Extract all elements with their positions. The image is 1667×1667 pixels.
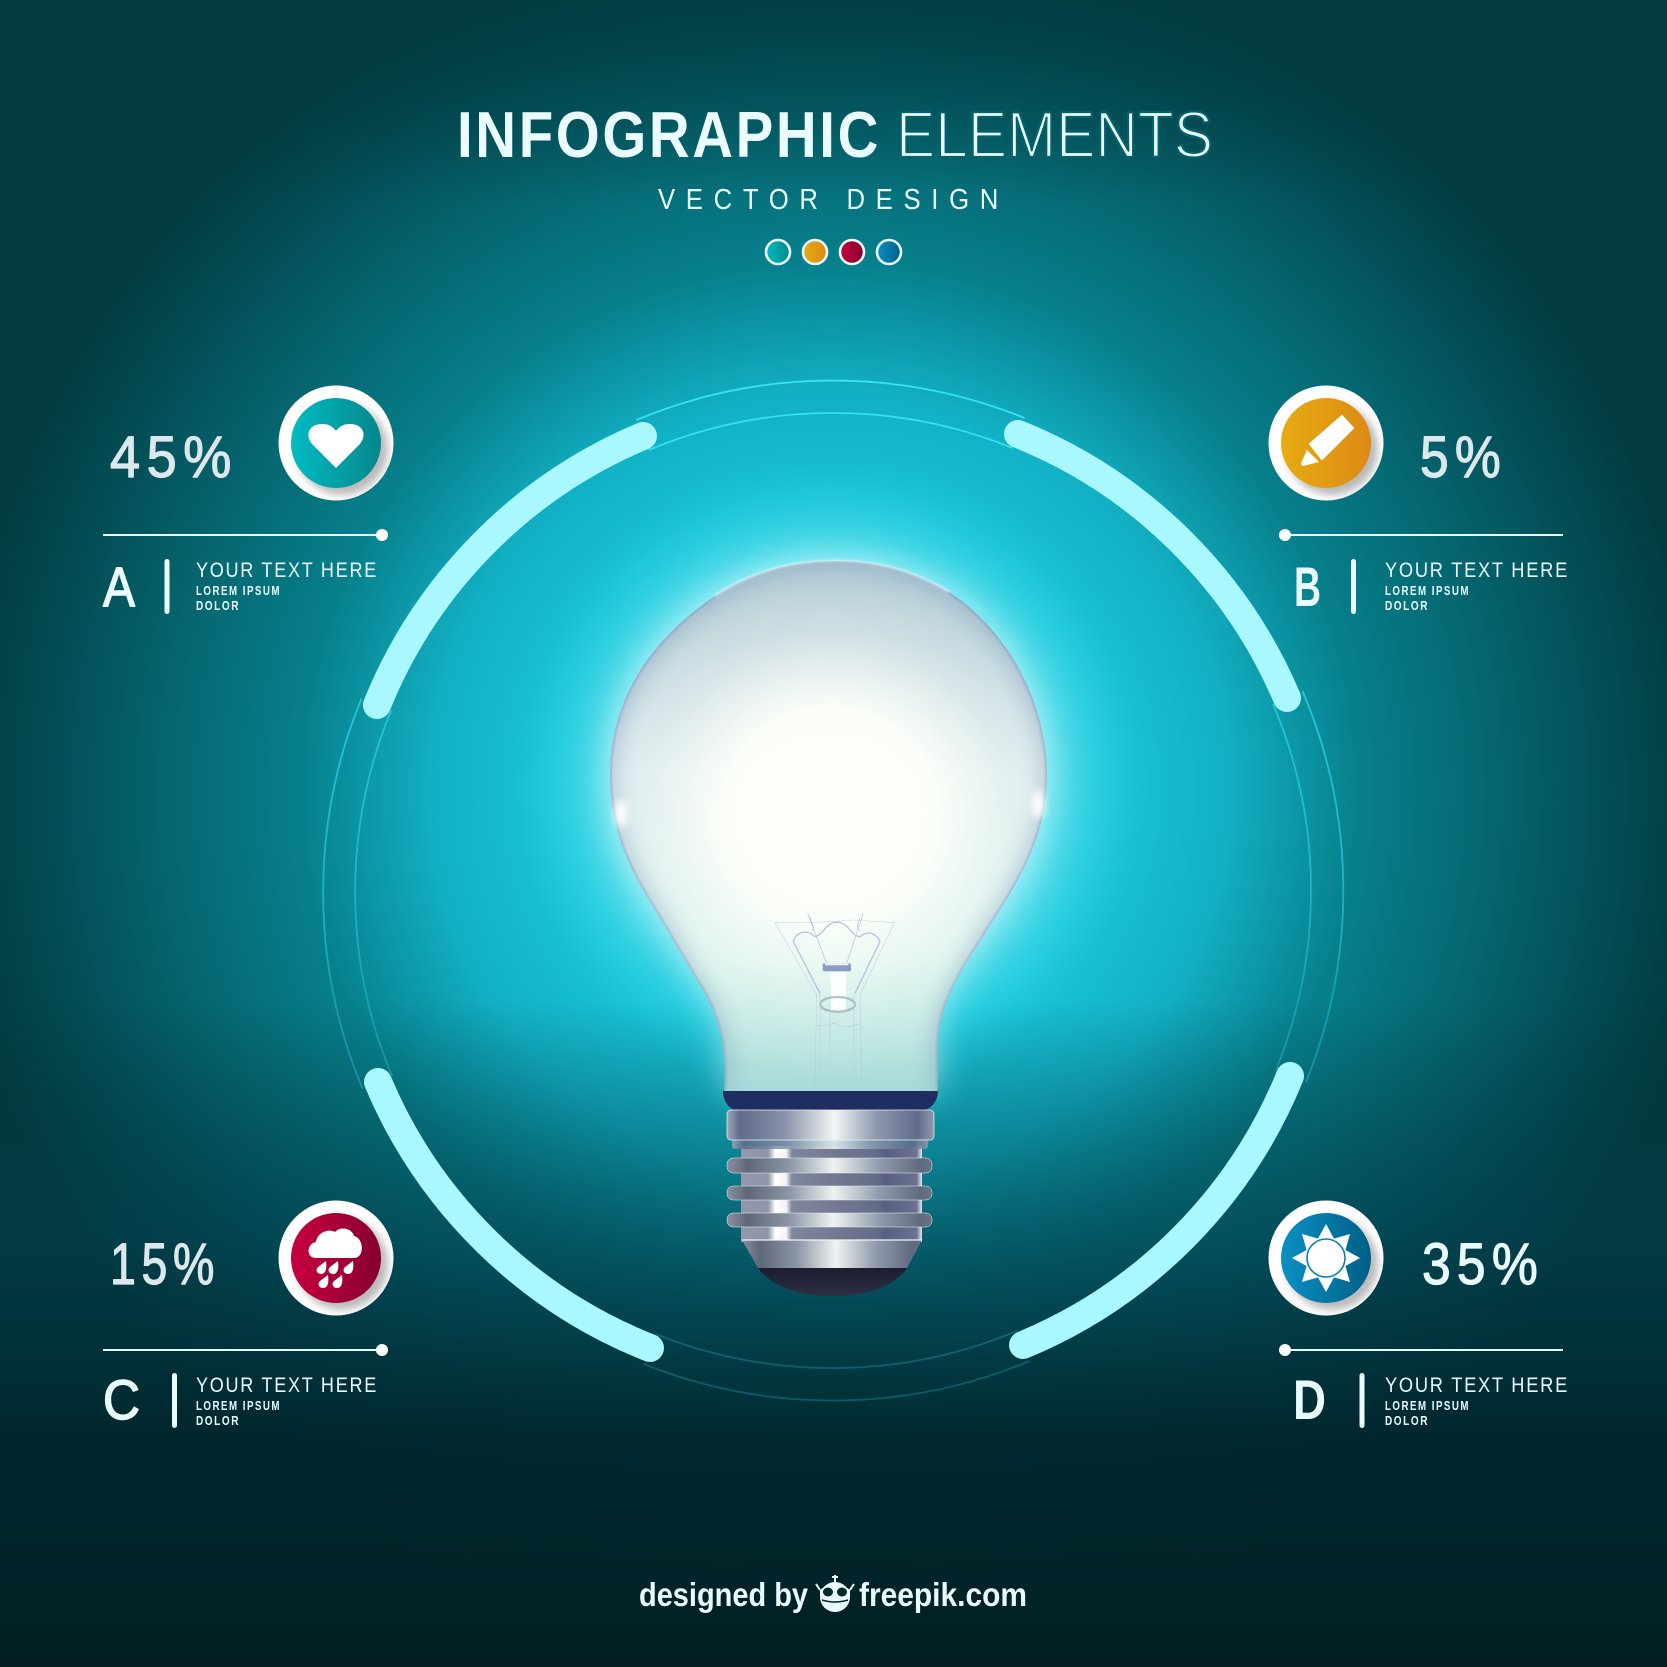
letter: B	[1294, 555, 1321, 618]
bar	[1360, 1373, 1364, 1428]
title	[457, 98, 1213, 171]
text block: DOLOR	[196, 598, 240, 613]
value: 15%	[110, 1232, 220, 1297]
text block: DOLOR	[1385, 598, 1429, 613]
bulb glass	[610, 558, 1050, 1091]
divider	[103, 1344, 388, 1356]
icon: freepik mascot	[816, 1575, 854, 1612]
panel: C 15%	[103, 1200, 394, 1431]
bulb glow	[510, 460, 1150, 1100]
text block: DOLOR	[196, 1413, 240, 1428]
title: ELEMENTS	[896, 98, 1213, 171]
light bulb	[610, 558, 1050, 1296]
panel: A 45%	[103, 386, 394, 618]
colour dots	[766, 240, 901, 264]
icon: rain cloud badge	[278, 1200, 394, 1316]
letter: A	[103, 555, 136, 618]
footer credit	[639, 1575, 1027, 1613]
text block	[1385, 559, 1569, 613]
divider	[103, 529, 388, 541]
bar	[172, 1373, 177, 1428]
subtitle: VECTOR DESIGN	[658, 184, 1009, 216]
thin rings	[323, 381, 1343, 1400]
footer credit: designed by	[639, 1576, 809, 1613]
divider	[1279, 1344, 1563, 1356]
letter: D	[1293, 1368, 1326, 1431]
icon: heart badge	[278, 386, 394, 500]
footer credit: freepik.com	[859, 1576, 1027, 1613]
panel: B 5%	[1268, 386, 1569, 618]
value: 45%	[110, 425, 238, 490]
dark neck band	[723, 1091, 938, 1110]
text block	[1385, 1374, 1569, 1428]
text block: YOUR TEXT HERE	[1385, 1374, 1569, 1397]
text block: LOREM IPSUM	[1385, 1398, 1470, 1413]
text block	[196, 559, 378, 613]
text block: LOREM IPSUM	[196, 583, 281, 598]
filament	[775, 913, 894, 1088]
bar	[164, 559, 170, 614]
value: 5%	[1420, 425, 1507, 490]
text block: LOREM IPSUM	[1385, 583, 1470, 598]
bar	[1351, 559, 1356, 614]
icon: sun badge	[1268, 1200, 1384, 1316]
divider	[1279, 529, 1563, 541]
screw base	[727, 1110, 934, 1296]
value: 35%	[1422, 1232, 1544, 1297]
text block: LOREM IPSUM	[196, 1398, 281, 1413]
icon: pencil badge	[1268, 386, 1384, 500]
text block: YOUR TEXT HERE	[196, 1374, 378, 1397]
title: INFOGRAPHIC	[457, 98, 881, 171]
text block	[196, 1374, 378, 1428]
thick ring arcs	[377, 434, 1290, 1348]
letter: C	[103, 1368, 140, 1431]
text block: DOLOR	[1385, 1413, 1429, 1428]
text block: YOUR TEXT HERE	[196, 559, 378, 582]
panel: D 35%	[1268, 1200, 1569, 1431]
text block: YOUR TEXT HERE	[1385, 559, 1569, 582]
